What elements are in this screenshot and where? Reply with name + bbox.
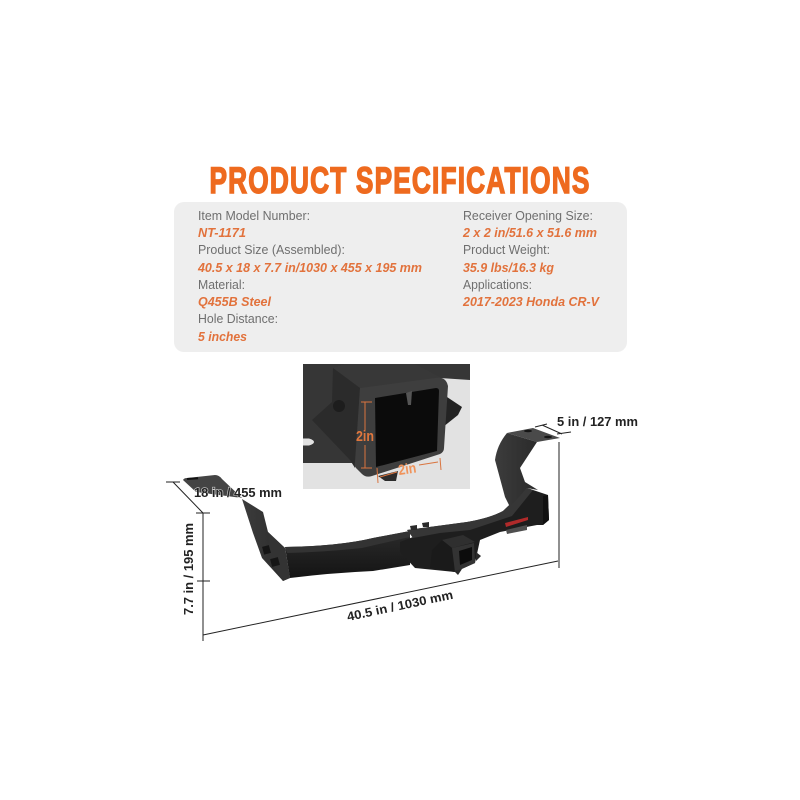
right bracket bbox=[495, 428, 560, 507]
hitch product illustration bbox=[183, 428, 560, 581]
dimension: 18 in width bbox=[166, 482, 282, 513]
dimension: 40.5 in length bbox=[203, 561, 558, 635]
spec column: left: Material: bbox=[198, 278, 245, 292]
spec column: left: Q455B Steel bbox=[198, 295, 272, 309]
dimension: 2in width: 2in bbox=[397, 461, 417, 479]
spec column: right: 2017-2023 Honda CR-V bbox=[462, 295, 601, 309]
spec column: right bbox=[462, 209, 601, 309]
spec column: right: Receiver Opening Size: bbox=[463, 209, 593, 223]
spec column: left: 5 inches bbox=[198, 330, 247, 344]
title: PRODUCT SPECIFICATIONS bbox=[210, 160, 589, 201]
spec column: left: Product Size (Assembled): bbox=[198, 243, 345, 257]
spec column: right: Applications: bbox=[463, 278, 532, 292]
receiver tube bbox=[430, 535, 481, 575]
dimension: 18 in width: 18 in / 455 mm bbox=[194, 486, 282, 500]
left bracket bbox=[183, 475, 290, 581]
dimension: 5 in bracket bbox=[535, 415, 638, 568]
panel: specifications bbox=[174, 202, 627, 352]
bolts bbox=[410, 522, 429, 530]
spec column: right: Product Weight: bbox=[463, 243, 550, 257]
main beam bbox=[285, 531, 410, 578]
spec column: right: 2 x 2 in/51.6 x 51.6 mm bbox=[462, 226, 597, 240]
dimension: 7.7 in height bbox=[182, 513, 210, 641]
right end cap bbox=[543, 495, 549, 525]
dimension: 5 in bracket: 5 in / 127 mm bbox=[557, 415, 638, 429]
inset photo: receiver opening bbox=[303, 364, 470, 489]
spec column: right: 35.9 lbs/16.3 kg bbox=[463, 261, 554, 275]
spec column: left bbox=[197, 209, 422, 344]
spec column: left: Item Model Number: bbox=[198, 209, 310, 223]
dimension: 40.5 in length: 40.5 in / 1030 mm bbox=[346, 588, 454, 624]
dimension: 2in height: 2in bbox=[356, 429, 374, 445]
dimension: 2in width bbox=[377, 458, 441, 483]
spec column: left: 40.5 x 18 x 7.7 in/1030 x 455 x 195 mm bbox=[197, 261, 422, 275]
center and right beam bbox=[400, 488, 549, 572]
logo label bbox=[505, 517, 528, 534]
dimension: 7.7 in height: 7.7 in / 195 mm bbox=[182, 523, 196, 615]
spec column: left: NT-1171 bbox=[198, 226, 246, 240]
dimension: 2in height bbox=[356, 402, 374, 468]
spec column: left: Hole Distance: bbox=[198, 312, 278, 326]
